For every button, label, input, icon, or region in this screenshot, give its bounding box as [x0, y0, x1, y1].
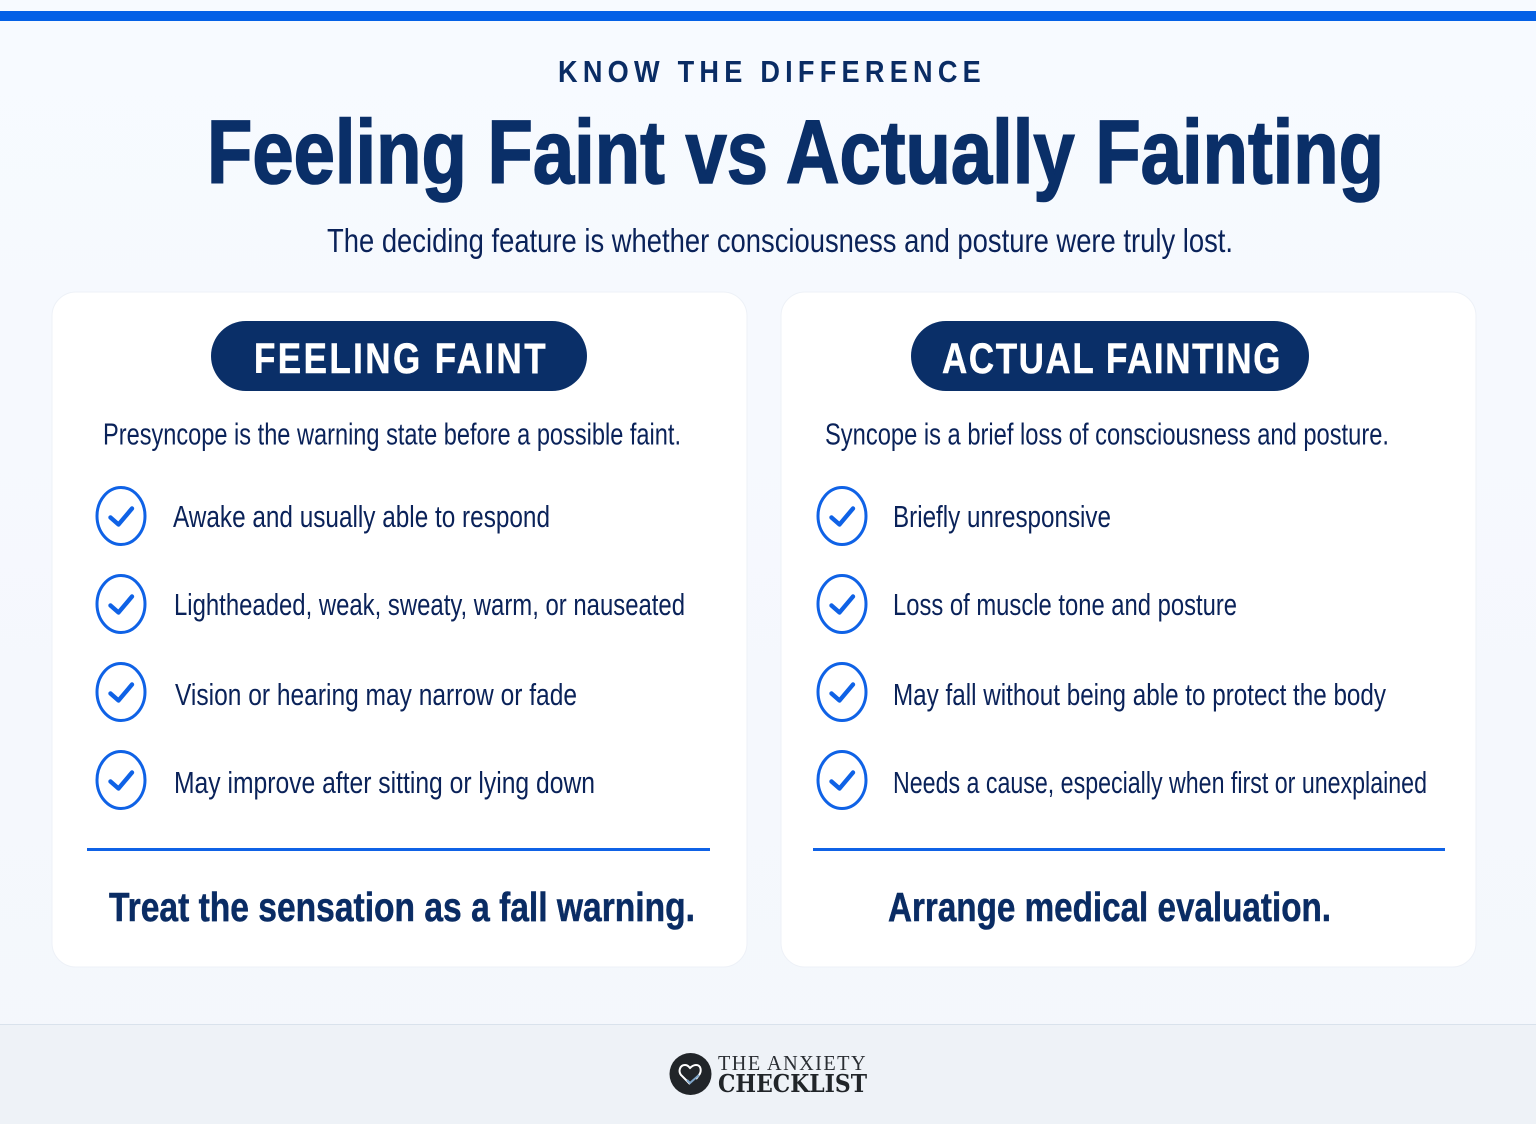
heading pill: feeling faint: FEELING FAINT: [254, 335, 548, 383]
checklist item 1: [818, 488, 1111, 544]
checklist item 2: Lightheaded, weak, sweaty, warm, or nauseated: [174, 587, 685, 622]
checklist item 3: [818, 664, 1386, 720]
kicker: KNOW THE DIFFERENCE: [558, 54, 986, 89]
subtitle: The deciding feature is whether consciousness and posture were truly lost.: [327, 222, 1233, 259]
intro text: Presyncope is the warning state before a possible faint.: [103, 416, 681, 452]
panel: feeling faint: [52, 292, 747, 967]
checklist item 4: May improve after sitting or lying down: [174, 765, 595, 800]
checklist item 3: May fall without being able to protect the body: [893, 677, 1386, 712]
checklist item 3: Vision or hearing may narrow or fade: [175, 677, 577, 712]
logo wordmark: [718, 1051, 867, 1098]
takeaway: Treat the sensation as a fall warning.: [109, 884, 695, 930]
checklist item 4: [818, 752, 1427, 808]
checklist item 4: [97, 752, 595, 808]
checklist item 3: [97, 664, 577, 720]
icon: heart check: [670, 1053, 712, 1095]
checklist item 1: [97, 488, 550, 544]
top accent bar: [0, 11, 1536, 21]
heading pill: actual fainting: ACTUAL FAINTING: [942, 335, 1282, 383]
checklist item 1: Awake and usually able to respond: [173, 499, 550, 534]
footer logo: [670, 1051, 867, 1098]
takeaway: Arrange medical evaluation.: [888, 884, 1331, 930]
logo wordmark: THE ANXIETY: [718, 1051, 867, 1075]
checklist item 2: [818, 576, 1237, 632]
heading pill: actual fainting: [911, 321, 1309, 391]
logo wordmark: CHECKLIST: [718, 1069, 867, 1098]
checklist item 1: Briefly unresponsive: [893, 499, 1111, 534]
checklist item 2: Loss of muscle tone and posture: [893, 587, 1237, 622]
checklist item 2: [97, 576, 685, 632]
panel: actual fainting: [781, 292, 1476, 967]
heading pill: feeling faint: [211, 321, 587, 391]
footer band: [0, 1024, 1536, 1124]
